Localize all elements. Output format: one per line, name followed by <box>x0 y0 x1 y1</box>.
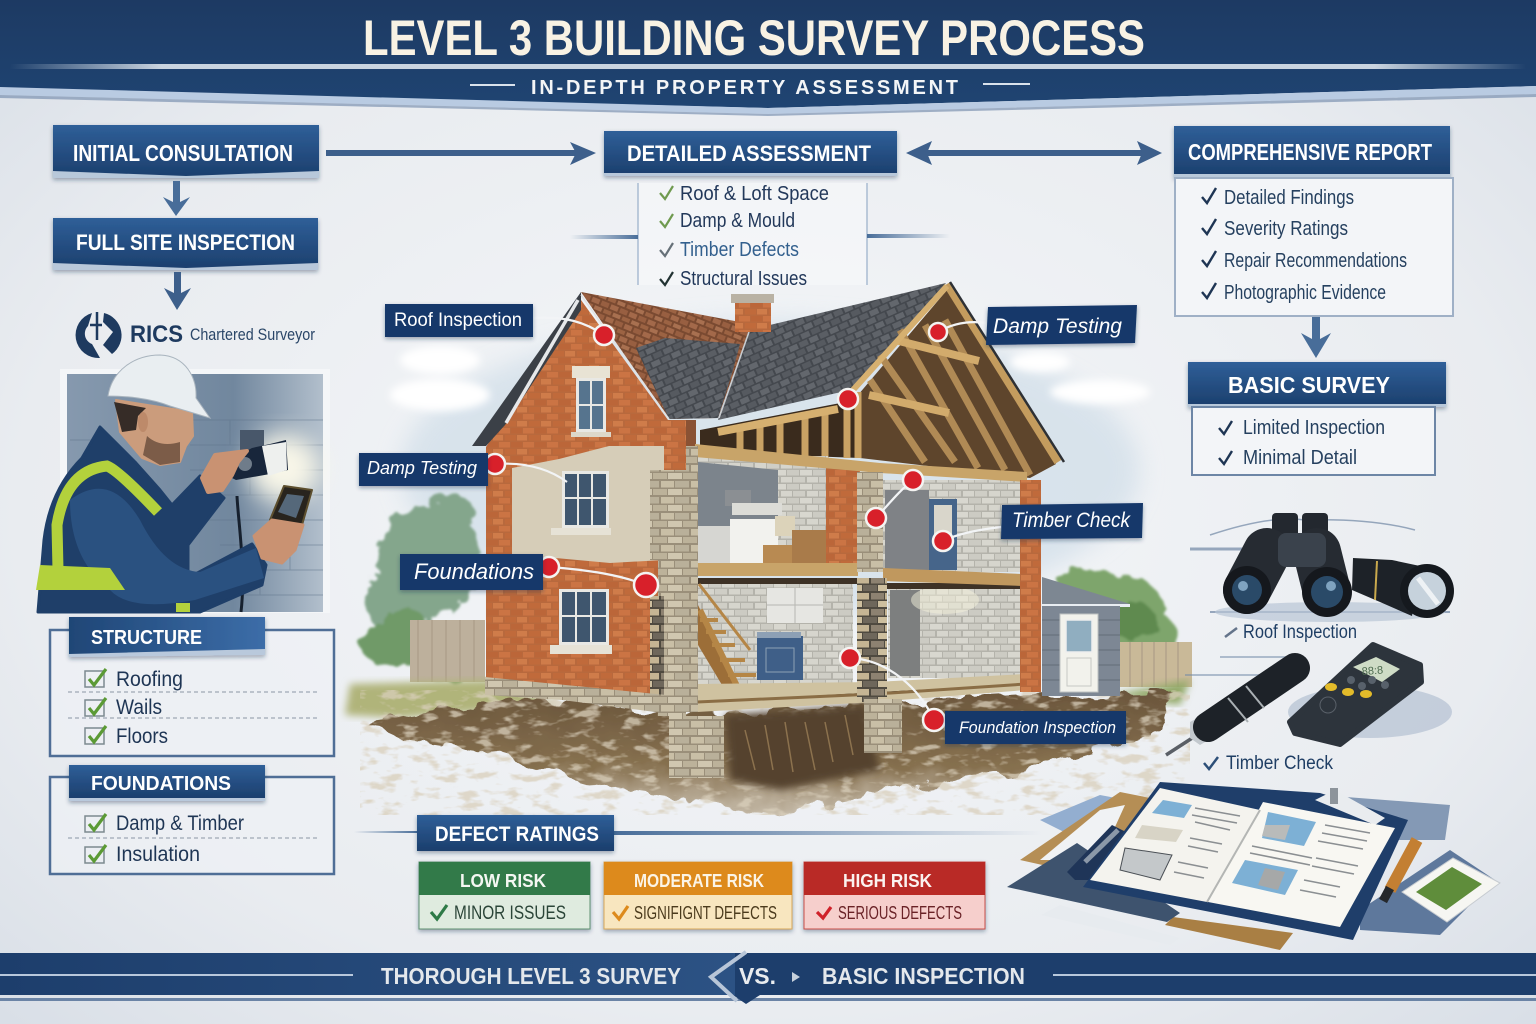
chimney <box>731 294 774 332</box>
trees <box>361 495 1179 684</box>
rating: low risk: MINOR ISSUES <box>454 903 566 924</box>
subtitle: IN-DEPTH PROPERTY ASSESSMENT <box>531 77 958 99</box>
icon: probe and moisture meter: 88:8 <box>1361 665 1384 678</box>
section heading: defect ratings: DEFECT RATINGS <box>435 823 599 846</box>
callout: foundation inspection <box>945 711 1126 744</box>
hi-vis stripes <box>57 466 158 570</box>
icon: probe and moisture meter <box>1166 645 1452 755</box>
step: full site inspection <box>53 218 318 270</box>
foundations heading <box>69 765 265 801</box>
front windows <box>550 366 612 654</box>
helmet <box>108 355 210 418</box>
panel: foundations <box>50 765 334 874</box>
foundations checklist <box>85 812 244 866</box>
lower rooms <box>698 582 828 690</box>
structure heading: STRUCTURE <box>91 627 202 649</box>
pen <box>1383 840 1417 901</box>
structure heading <box>69 617 265 657</box>
callout: damp testing right <box>986 305 1137 345</box>
panel: assessment checklist <box>570 183 950 290</box>
panel: assessment checklist: Structural Issues <box>680 268 807 290</box>
arrow: consultation to assessment <box>326 142 596 165</box>
rating: low risk <box>419 862 590 929</box>
step: full site inspection: FULL SITE INSPECTION <box>76 230 295 255</box>
house front wall <box>485 300 696 716</box>
upper rooms <box>698 456 828 566</box>
section heading: defect ratings <box>354 815 1042 851</box>
rating: moderate risk: SIGNIFIGNT DEFECTS <box>634 903 777 923</box>
cutaway interior <box>669 282 1064 778</box>
structure checklist: Roofing <box>116 668 183 691</box>
foundations heading: FOUNDATIONS <box>91 773 231 795</box>
footer banner <box>0 952 1536 1004</box>
staircase <box>698 584 756 690</box>
rating: moderate risk: MODERATE RISK <box>634 871 764 891</box>
arrow: report to basic survey <box>1301 317 1331 358</box>
rating: moderate risk <box>604 862 792 929</box>
panel: basic survey checklist <box>1192 407 1435 475</box>
footer text left: THOROUGH LEVEL 3 SURVEY <box>381 963 681 989</box>
step: comprehensive report <box>1174 126 1450 178</box>
stored boxes <box>698 490 826 564</box>
callout: damp testing left: Damp Testing <box>367 458 477 478</box>
rating: high risk <box>804 862 985 929</box>
panel: assessment checklist: Timber Defects <box>680 239 799 261</box>
foundations checklist: Insulation <box>116 843 200 866</box>
panel: report checklist: Photographic Evidence <box>1224 282 1386 304</box>
stone column <box>857 472 887 702</box>
step: initial consultation <box>53 125 319 178</box>
step: comprehensive report: COMPREHENSIVE REPORT <box>1188 139 1432 165</box>
RICS logo: Chartered Surveyor <box>190 325 315 344</box>
hands and phone <box>202 451 247 492</box>
photo print <box>1402 858 1500 922</box>
label: roof inspection tool: Roof Inspection <box>1243 622 1357 643</box>
rating: high risk: SERIOUS DEFECTS <box>838 903 962 923</box>
callout: timber check <box>1001 503 1143 539</box>
footer vs: VS. <box>739 963 776 989</box>
structure checklist: Floors <box>116 725 168 748</box>
interior door <box>929 499 957 570</box>
label: timber check tool: Timber Check <box>1226 753 1333 774</box>
floors and beams <box>695 444 1027 482</box>
foundation piers <box>669 699 902 778</box>
arrow: down to site inspection <box>163 181 190 216</box>
callout: roof inspection <box>385 304 533 337</box>
structure checklist: Wails <box>116 696 162 719</box>
step: basic survey: BASIC SURVEY <box>1228 372 1390 398</box>
blue cabinet <box>757 632 803 680</box>
callout: foundation inspection: Foundation Inspection <box>959 718 1116 737</box>
panel: report checklist: Severity Ratings <box>1224 218 1348 240</box>
house scene backdrop <box>345 320 1192 815</box>
panel: report checklist: Detailed Findings <box>1224 187 1354 209</box>
panel: basic survey checklist: Minimal Detail <box>1243 447 1357 469</box>
jacket <box>38 427 266 612</box>
fences <box>410 620 485 682</box>
panel: report checklist <box>1175 178 1453 316</box>
meter in hand <box>224 430 288 480</box>
icon: binoculars and torch <box>1190 513 1454 622</box>
house roof <box>472 283 946 446</box>
panel: structure <box>50 617 334 756</box>
head <box>116 400 193 465</box>
rating: low risk: LOW RISK <box>460 871 546 891</box>
callout: damp testing left <box>359 453 488 486</box>
attic timbers <box>700 282 1064 478</box>
RICS logo <box>76 312 315 358</box>
step: detailed assessment: DETAILED ASSESSMENT <box>627 141 872 166</box>
panel: assessment checklist: Roof & Loft Space <box>680 183 829 205</box>
icon: survey report and papers <box>1007 782 1500 950</box>
panel: assessment checklist: Damp & Mould <box>680 210 795 232</box>
arrow: assessment to report <box>906 141 1162 165</box>
rating: high risk: HIGH RISK <box>843 871 932 891</box>
step: detailed assessment <box>604 131 897 176</box>
footer vs <box>739 963 800 989</box>
callout: foundations: Foundations <box>414 559 534 584</box>
RICS logo: RICS <box>130 321 183 348</box>
grass and soil <box>345 680 560 718</box>
annex building <box>1040 577 1130 696</box>
panel: basic survey checklist: Limited Inspection <box>1243 417 1385 439</box>
callout: damp testing right: Damp Testing <box>993 315 1122 338</box>
structure checklist <box>85 668 183 748</box>
callout: roof inspection: Roof Inspection <box>394 310 522 331</box>
step: initial consultation: INITIAL CONSULTATION <box>73 140 293 166</box>
panel: report checklist: Repair Recommendations <box>1224 250 1407 272</box>
callout: foundations <box>400 554 543 590</box>
header banner <box>0 0 1536 116</box>
inspection points <box>485 318 1001 731</box>
foundations checklist: Damp & Timber <box>116 812 244 835</box>
title: LEVEL 3 BUILDING SURVEY PROCESS <box>363 10 1145 66</box>
footer text right: BASIC INSPECTION <box>822 963 1025 989</box>
step: basic survey <box>1188 362 1446 407</box>
arrow: down to surveyor <box>164 272 191 310</box>
surveyor illustration <box>36 355 330 613</box>
callout: timber check: Timber Check <box>1012 509 1131 532</box>
